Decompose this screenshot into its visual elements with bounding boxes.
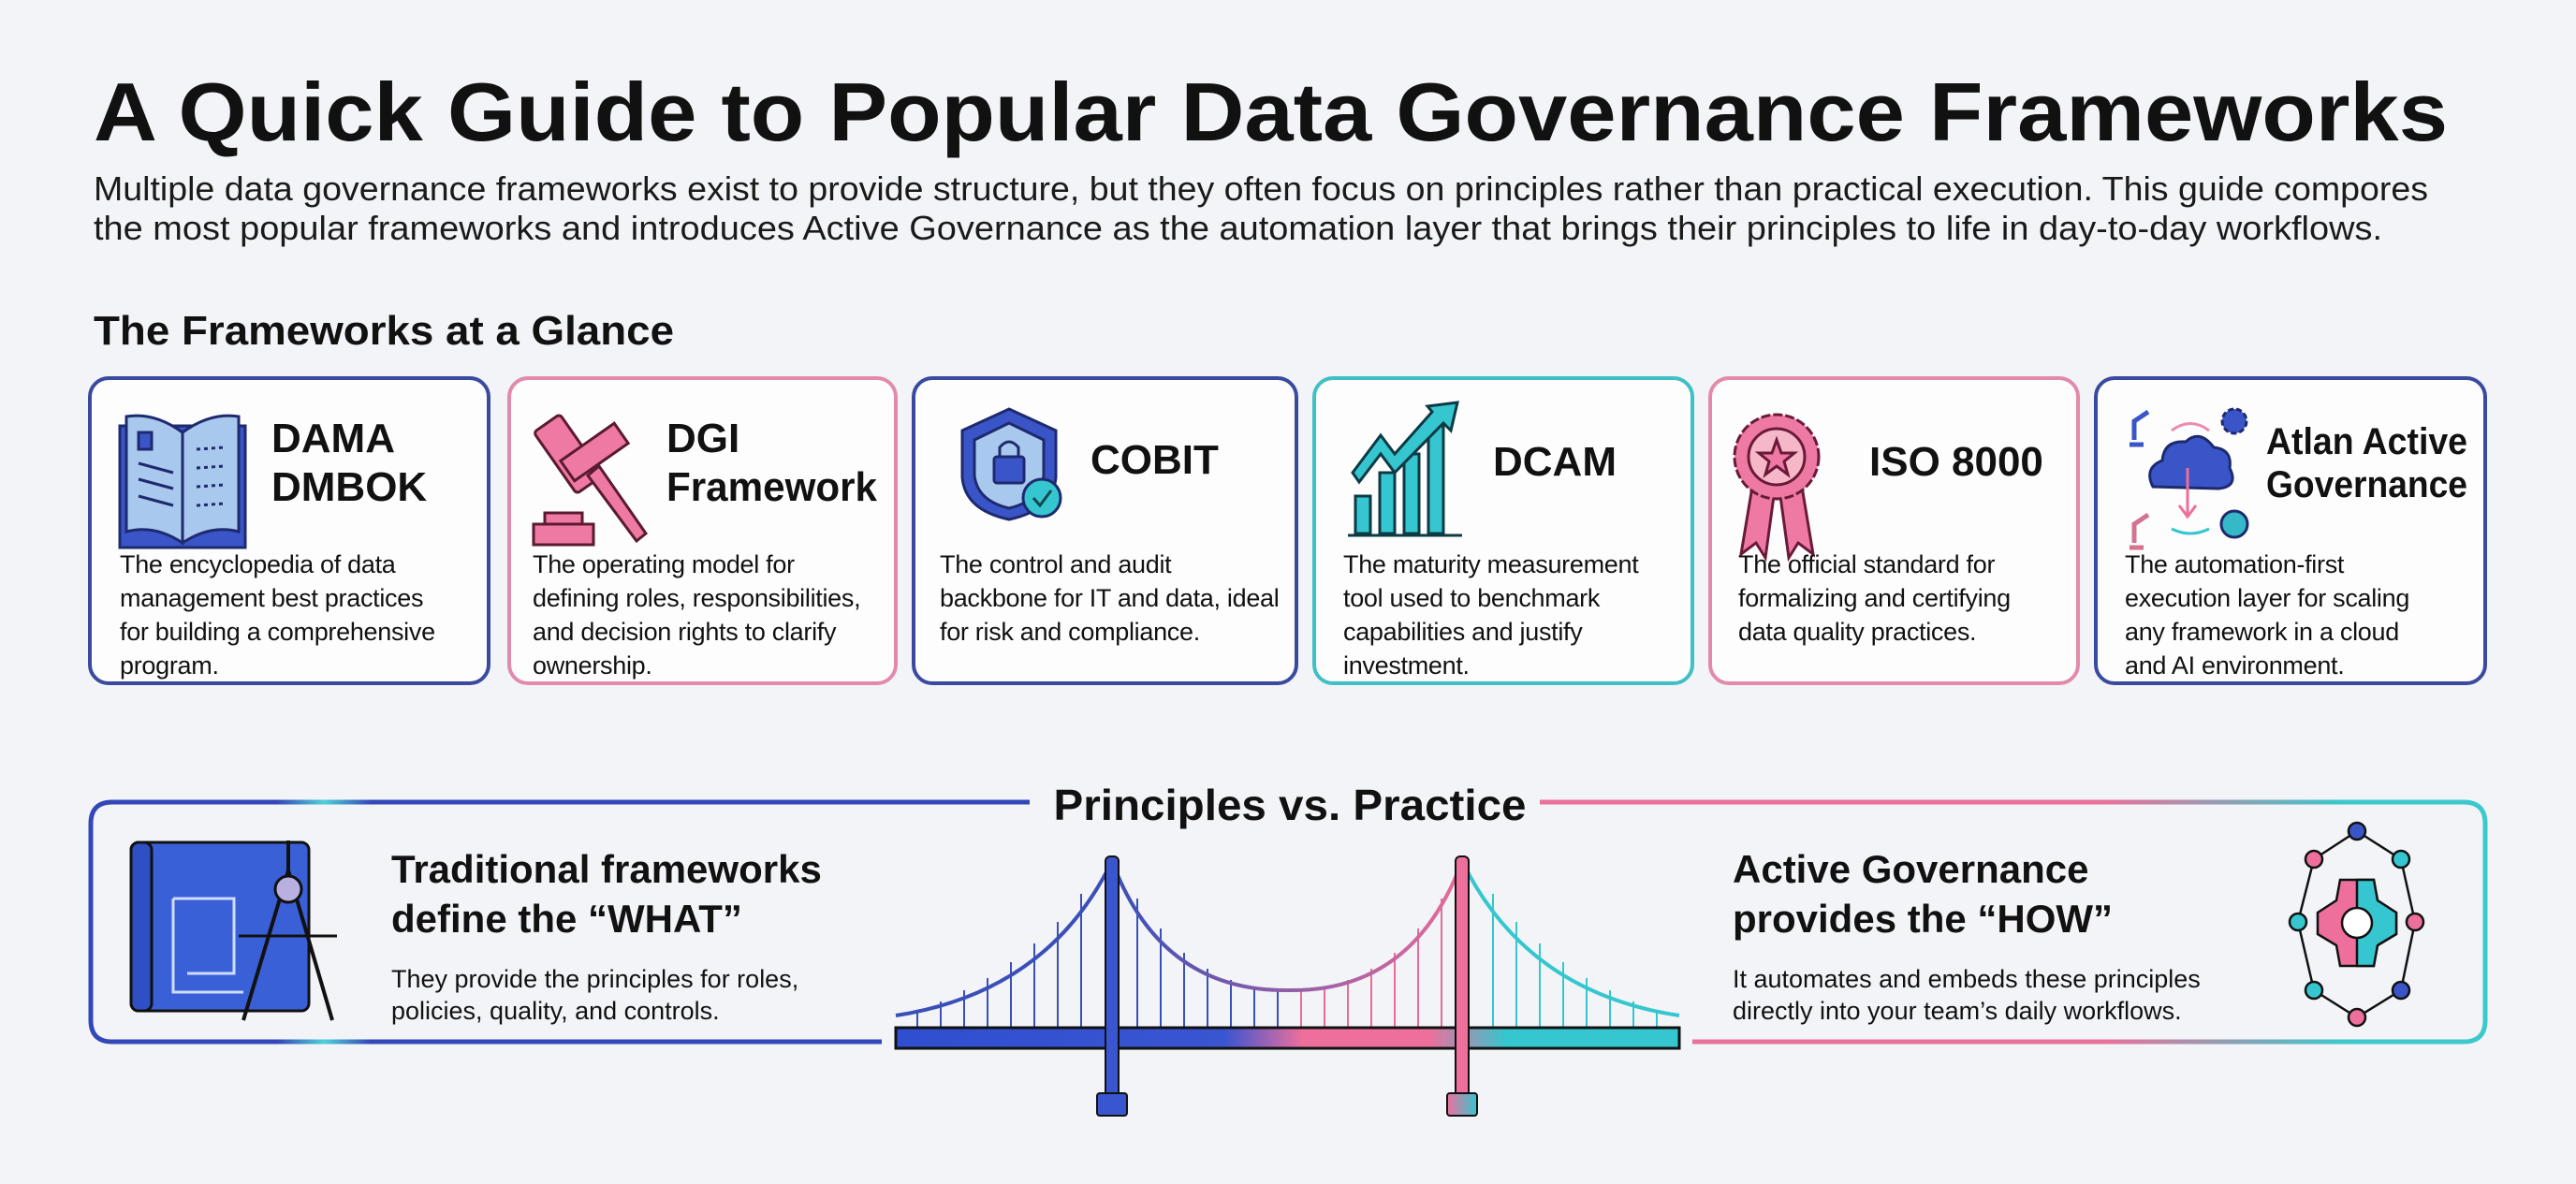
subtitle: the most popular frameworks and introduces Active Governance as the automation layer that brings their principles to life in day-to-day workflows.	[94, 209, 2382, 247]
panel: DAMA DMBOK: DMBOK	[271, 464, 427, 510]
panel: Atlan Active Governance: Governance	[2266, 464, 2467, 505]
section heading: frameworks at a glance: The Frameworks at a Glance	[94, 308, 674, 354]
panel: DCAM: capabilities and justify	[1343, 618, 1583, 646]
icon: gear network	[2290, 823, 2423, 1026]
panel: DCAM	[1314, 378, 1692, 683]
panel: DGI Framework: Framework	[666, 464, 878, 510]
panel: DAMA DMBOK: The encyclopedia of data	[120, 550, 397, 578]
panel: Atlan Active Governance	[2096, 378, 2485, 683]
text: active governance: Active Governance	[1733, 847, 2089, 891]
text: traditional frameworks: Traditional frameworks	[391, 847, 822, 891]
subtitle: Multiple data governance frameworks exist to provide structure, but they often focus on principles rather than practical execution. This guide compores	[94, 169, 2428, 208]
panel: DAMA DMBOK: for building a comprehensive	[120, 618, 435, 646]
panel: DGI Framework: defining roles, responsibilities,	[533, 584, 860, 612]
panel: DCAM: investment.	[1343, 651, 1470, 680]
panel: DCAM: The maturity measurement	[1343, 550, 1639, 578]
panel: DAMA DMBOK: DAMA	[271, 416, 395, 461]
panel: DGI Framework: DGI	[666, 416, 739, 461]
icon: blueprint and compass	[131, 840, 337, 1020]
panel: ISO 8000	[1710, 378, 2078, 683]
panel: ISO 8000: ISO 8000	[1869, 439, 2043, 485]
text: active governance	[1733, 847, 2201, 1025]
panel: DCAM: tool used to benchmark	[1343, 584, 1601, 612]
icon: shield with lock	[962, 409, 1061, 519]
text: traditional frameworks: They provide the principles for roles,	[391, 965, 798, 993]
text: active governance: directly into your team’s daily workflows.	[1733, 997, 2182, 1025]
panel: COBIT: COBIT	[1090, 437, 1219, 483]
panel: ISO 8000: data quality practices.	[1738, 618, 1976, 646]
panel: DAMA DMBOK: program.	[120, 651, 219, 680]
text: traditional frameworks: policies, quality, and controls.	[391, 997, 720, 1025]
icon: automation cloud	[2130, 409, 2247, 548]
heading: principles vs practice: Principles vs. Practice	[1054, 781, 1526, 829]
panel: DGI Framework	[509, 378, 896, 683]
title: A Quick Guide to Popular Data Governance Frameworks	[94, 66, 2448, 158]
icon: book	[120, 416, 245, 548]
panel: DCAM: DCAM	[1493, 439, 1617, 485]
panel: Atlan Active Governance: and AI environment.	[2125, 651, 2344, 680]
icon: award ribbon	[1734, 415, 1819, 558]
panel: DGI Framework: and decision rights to clarify	[533, 618, 837, 646]
subtitle	[94, 169, 2428, 247]
panel: DAMA DMBOK	[90, 378, 489, 683]
panel: Atlan Active Governance: execution layer for scaling	[2125, 584, 2409, 612]
panel: DGI Framework: The operating model for	[533, 550, 795, 578]
text: active governance: It automates and embeds these principles	[1733, 965, 2201, 993]
panel: principles vs practice frame	[91, 802, 2485, 1042]
panel: Atlan Active Governance: any framework in a cloud	[2125, 618, 2399, 646]
panel: DAMA DMBOK: management best practices	[120, 584, 423, 612]
text: traditional frameworks	[391, 847, 822, 1025]
icon: gavel	[534, 414, 646, 545]
panel: COBIT: The control and audit	[940, 550, 1172, 578]
text: active governance: provides the “HOW”	[1733, 897, 2113, 941]
panel: Atlan Active Governance: The automation-first	[2125, 550, 2345, 578]
icon: growth chart	[1348, 402, 1462, 535]
panel: DGI Framework: ownership.	[533, 651, 652, 680]
panel: COBIT: backbone for IT and data, ideal	[940, 584, 1279, 612]
panel: ISO 8000: The official standard for	[1738, 550, 1995, 578]
panel: ISO 8000: formalizing and certifying	[1738, 584, 2011, 612]
panel: COBIT	[914, 378, 1296, 683]
panel: COBIT: for risk and compliance.	[940, 618, 1200, 646]
panel: Atlan Active Governance: Atlan Active	[2266, 421, 2467, 462]
bridge	[896, 856, 1679, 1116]
text: traditional frameworks: define the “WHAT”	[391, 897, 742, 941]
